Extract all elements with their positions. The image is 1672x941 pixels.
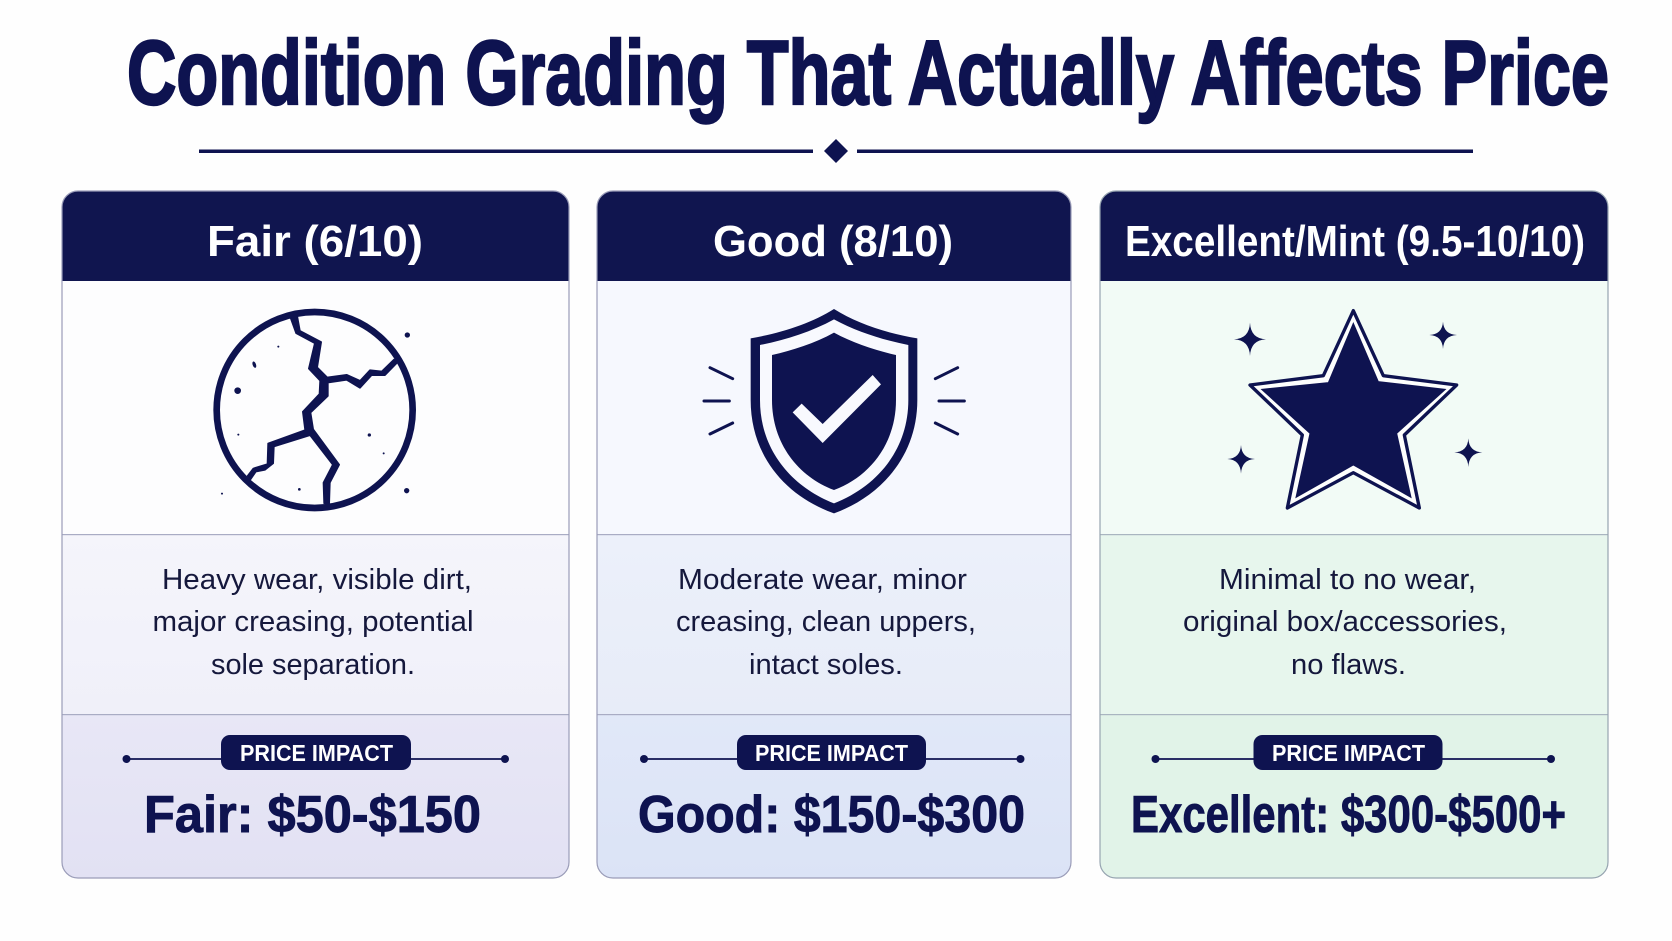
- description: Excellent/Mint: original box/accessories,: [1183, 606, 1507, 638]
- price impact label: Fair: [122, 735, 509, 770]
- price impact label: Excellent/Mint: PRICE IMPACT: [1272, 740, 1426, 766]
- heading: Excellent/Mint (9.5-10/10): Excellent/Mint (9.5-10/10): [1125, 217, 1585, 266]
- price impact label: Excellent/Mint: [1152, 735, 1555, 770]
- panel: Good: [597, 191, 1071, 878]
- price: Fair: Fair: $50-$150: [144, 786, 481, 844]
- price impact label: Fair: PRICE IMPACT: [240, 740, 394, 766]
- description: Fair: [152, 564, 474, 681]
- description: Good: creasing, clean uppers,: [676, 606, 976, 638]
- description: Fair: sole separation.: [211, 649, 415, 681]
- price impact label: Good: [640, 735, 1024, 770]
- icon: cracked circle: [217, 312, 413, 508]
- description: Excellent/Mint: no flaws.: [1291, 649, 1406, 681]
- panel: Excellent/Mint: [1100, 191, 1608, 878]
- heading: Good (8/10): Good (8/10): [713, 217, 953, 266]
- price: Good: Good: $150-$300: [638, 786, 1025, 844]
- title divider with diamond: [199, 139, 1473, 163]
- price impact label: Good: PRICE IMPACT: [755, 740, 909, 766]
- description: Fair: Heavy wear, visible dirt,: [162, 564, 472, 596]
- heading: Fair (6/10): Fair (6/10): [207, 217, 423, 266]
- description: Excellent/Mint: [1183, 564, 1507, 681]
- icon: shield with check: [704, 309, 964, 513]
- description: Good: Moderate wear, minor: [678, 564, 967, 596]
- price: Excellent/Mint: Excellent: $300-$500+: [1131, 786, 1566, 844]
- description: Good: intact soles.: [749, 649, 903, 681]
- icon: star with sparkles: [1227, 311, 1482, 508]
- description: Fair: major creasing, potential: [152, 606, 474, 638]
- panel: Fair: [62, 191, 569, 878]
- description: Good: [676, 564, 976, 681]
- description: Excellent/Mint: Minimal to no wear,: [1219, 564, 1476, 596]
